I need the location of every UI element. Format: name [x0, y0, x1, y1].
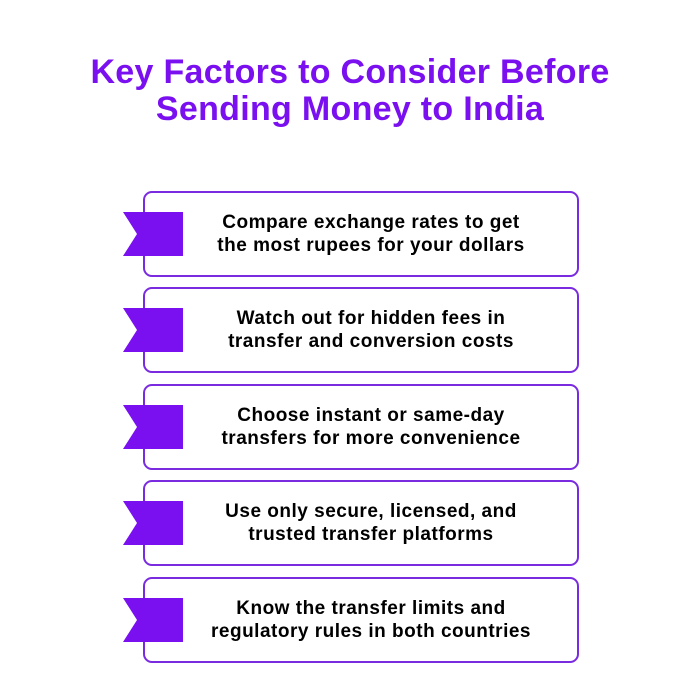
card 3: Choose instant or same-day	[237, 405, 505, 426]
title: Key Factors to Consider Before	[90, 53, 610, 91]
card 4: Use only secure, licensed, and	[225, 501, 517, 522]
card 3: transfers for more convenience	[221, 428, 521, 449]
card 1: Compare exchange rates to get	[222, 212, 520, 233]
card 5: Know the transfer limits and	[236, 598, 506, 619]
card 2: transfer and conversion costs	[228, 331, 514, 352]
card 2	[143, 287, 579, 373]
card 5: regulatory rules in both countries	[211, 621, 531, 642]
card 1: the most rupees for your dollars	[217, 235, 525, 256]
card 5	[143, 577, 579, 663]
card 1	[143, 191, 579, 277]
icon: ribbon 5	[123, 598, 183, 642]
title	[90, 53, 610, 128]
card 4	[143, 480, 579, 566]
icon: ribbon 4	[123, 501, 183, 545]
card 3	[143, 384, 579, 470]
card 4: trusted transfer platforms	[248, 524, 494, 545]
icon: ribbon 3	[123, 405, 183, 449]
icon: ribbon 2	[123, 308, 183, 352]
title: Sending Money to India	[156, 90, 544, 128]
icon: ribbon 1	[123, 212, 183, 256]
card 2: Watch out for hidden fees in	[237, 308, 505, 329]
